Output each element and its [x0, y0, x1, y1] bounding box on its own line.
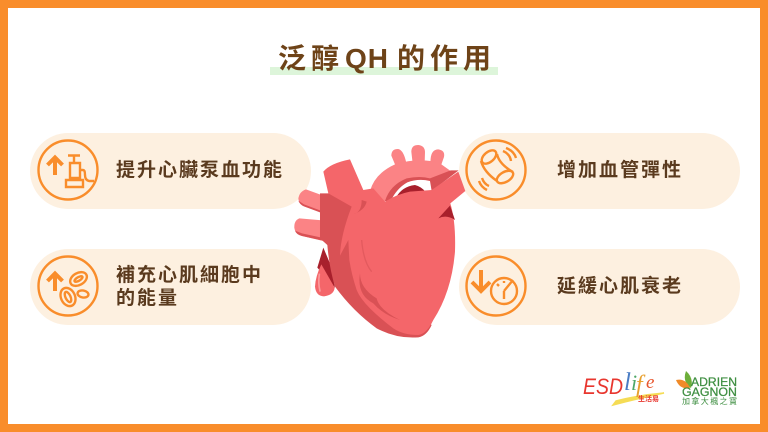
appendage dark gap	[317, 248, 335, 288]
logo: ESDlife: l	[624, 369, 631, 396]
body fold	[359, 273, 400, 320]
panel: vessel elasticity	[459, 133, 740, 209]
panel: slow ageing	[459, 249, 740, 325]
logo: ESDlife: i	[631, 370, 637, 395]
aorta arch and branches	[370, 145, 451, 202]
right dark chamber	[438, 206, 455, 220]
icon: arrow up with pump	[38, 140, 98, 200]
panel: cell energy	[30, 249, 311, 325]
illustration: heart	[294, 145, 465, 338]
logo: ESDlife: ESD	[583, 374, 623, 399]
logo: ESDlife: e	[646, 372, 654, 393]
aorta inner band	[385, 170, 459, 201]
text: cell energy: 補充心肌細胞中	[116, 265, 263, 286]
body crease	[362, 240, 372, 272]
logo: Adrien Gagnon	[676, 371, 737, 407]
main heart body with vena cava and aorta	[323, 159, 465, 335]
vena cava crease	[353, 200, 367, 214]
logo: ESDlife: f	[636, 372, 646, 398]
title: 泛醇QH 的作用	[278, 43, 496, 74]
text: cell energy	[116, 264, 263, 309]
appendage	[315, 264, 335, 296]
text: cell energy: 的能量	[116, 288, 179, 309]
icon: arrow down with gauge	[466, 256, 526, 316]
text: slow ageing: 延緩心肌衰老	[557, 276, 683, 297]
panel: pump function	[30, 133, 311, 209]
logo: ESDlife: 生活易	[638, 394, 659, 404]
icon: elastic blood vessel	[466, 140, 526, 200]
logo: Adrien Gagnon: ADRIEN	[691, 375, 737, 389]
left vessels	[298, 189, 331, 216]
aorta dark opening	[396, 185, 426, 198]
dark back band	[320, 193, 432, 338]
logo: ESDlife	[583, 369, 664, 405]
text: pump function: 提升心臟泵血功能	[116, 160, 284, 181]
text: vessel elasticity: 增加血管彈性	[557, 160, 683, 181]
icon: arrow up with blood cells	[38, 256, 98, 316]
logo: Adrien Gagnon: 加拿大楓之寶	[682, 396, 737, 407]
logo: Adrien Gagnon: GAGNON	[682, 385, 737, 399]
